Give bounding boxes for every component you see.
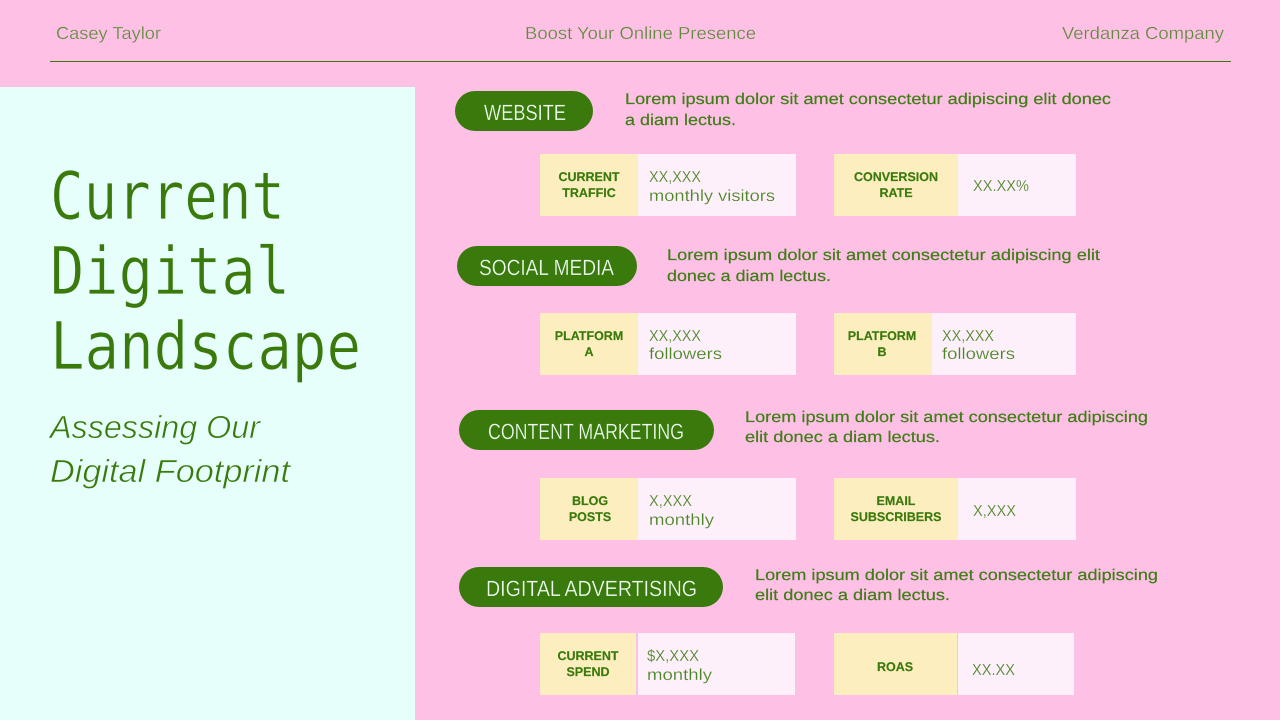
section: content marketing [459, 409, 1148, 540]
card: current spend: monthly [647, 667, 712, 684]
card: blog posts: BLOG [572, 494, 608, 508]
card: conversion rate: XX.XX% [973, 178, 1029, 195]
pill: content marketing [459, 410, 714, 450]
section: website [455, 91, 1111, 216]
header: deck title: Boost Your Online Presence [525, 23, 756, 43]
card: email subscribers: EMAIL [877, 494, 916, 508]
card: platform b: XX,XXX [942, 328, 994, 345]
card: current traffic: CURRENT [558, 170, 620, 184]
header: presenter name: Casey Taylor [56, 23, 161, 43]
card: blog posts: X,XXX [649, 493, 692, 510]
heading [50, 158, 361, 385]
card: conversion rate: CONVERSION [854, 170, 938, 184]
description: digital advertising: Lorem ipsum dolor sit amet consectetur adipiscing [755, 567, 1158, 584]
card: platform b: PLATFORM [848, 329, 916, 343]
description: content marketing: Lorem ipsum dolor sit amet consectetur adipiscing [745, 409, 1148, 426]
header: company name: Verdanza Company [1062, 23, 1224, 43]
pill: social media: SOCIAL MEDIA [479, 255, 614, 280]
heading: Current [50, 158, 285, 235]
card: email subscribers: X,XXX [973, 503, 1016, 520]
card: email subscribers [834, 478, 1076, 540]
card: current traffic: XX,XXX [649, 169, 701, 186]
card: current traffic: monthly visitors [649, 188, 775, 205]
card: platform a: PLATFORM [555, 329, 623, 343]
card: email subscribers: SUBSCRIBERS [850, 510, 942, 524]
card: blog posts [540, 478, 796, 540]
subtitle [48, 409, 291, 489]
card: platform b [834, 313, 1076, 375]
description: social media: Lorem ipsum dolor sit amet consectetur adipiscing elit [667, 247, 1101, 264]
card: platform b: followers [942, 346, 1015, 363]
pill: website: WEBSITE [484, 100, 566, 125]
card: conversion rate: RATE [879, 186, 913, 200]
pill: digital advertising [459, 567, 723, 607]
card: current spend: $X,XXX [647, 648, 699, 665]
pill: digital advertising: DIGITAL ADVERTISING [486, 576, 697, 601]
description: digital advertising [755, 567, 1158, 604]
card: current traffic [540, 154, 796, 216]
pill: social media [457, 246, 637, 286]
heading: Landscape [50, 308, 361, 385]
card: platform a: XX,XXX [649, 328, 701, 345]
section: digital advertising [459, 567, 1158, 695]
description: social media [667, 247, 1101, 285]
card: platform b: B [877, 345, 887, 359]
card: platform a [540, 313, 796, 375]
card: blog posts: monthly [649, 512, 714, 529]
description: website: Lorem ipsum dolor sit amet consectetur adipiscing elit donec [625, 91, 1111, 108]
description: social media: donec a diam lectus. [667, 268, 831, 285]
card: roas [834, 633, 1074, 695]
pill: website [455, 91, 593, 131]
card: current spend [540, 633, 795, 695]
pill: content marketing: CONTENT MARKETING [488, 419, 684, 444]
description: website: a diam lectus. [625, 112, 736, 129]
card: blog posts: POSTS [569, 510, 611, 524]
card: roas: ROAS [877, 660, 913, 674]
heading: Digital [50, 233, 290, 310]
card: conversion rate [834, 154, 1076, 216]
section: social media [457, 246, 1101, 375]
description: digital advertising: elit donec a diam lectus. [755, 587, 950, 604]
card: current spend: SPEND [566, 665, 610, 679]
subtitle: Digital Footprint [50, 453, 291, 489]
description: content marketing: elit donec a diam lectus. [745, 429, 940, 446]
description: website [625, 91, 1111, 129]
card: roas: XX.XX [972, 662, 1015, 679]
header bar [50, 23, 1231, 62]
panel: title [0, 87, 415, 720]
card: platform a: A [584, 345, 594, 359]
card: current spend: CURRENT [557, 649, 619, 663]
description: content marketing [745, 409, 1148, 446]
subtitle: Assessing Our [48, 409, 261, 445]
card: current traffic: TRAFFIC [562, 186, 616, 200]
card: platform a: followers [649, 346, 722, 363]
